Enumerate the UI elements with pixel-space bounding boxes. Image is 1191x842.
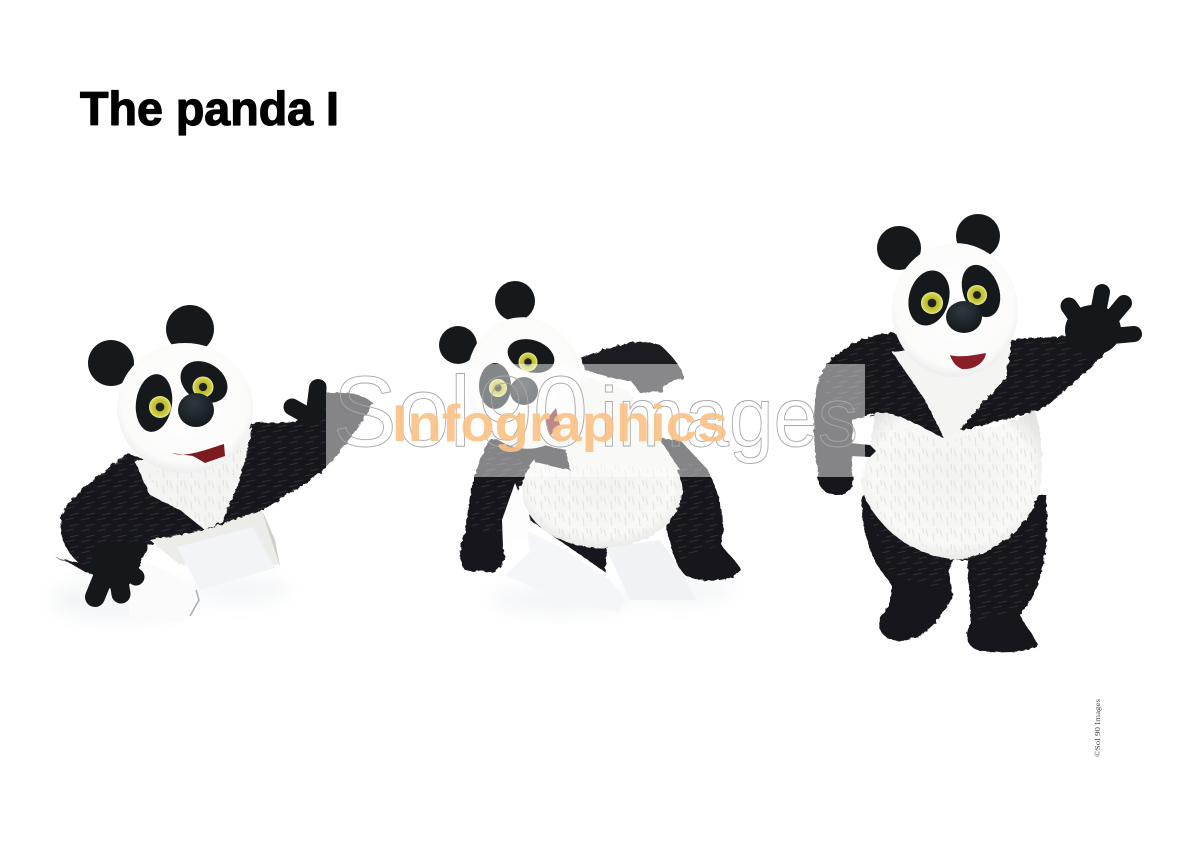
eyes: [921, 285, 987, 314]
mouth: [950, 353, 986, 369]
white chest fur: [145, 440, 245, 528]
belly: [522, 432, 682, 548]
eye patches: [479, 333, 559, 409]
watermark band: [326, 364, 865, 477]
thumb: [850, 443, 876, 457]
hand fingers: [91, 388, 318, 597]
white belly: [862, 410, 1042, 560]
nose: [946, 301, 982, 333]
mouth: [172, 444, 225, 463]
watermark wordmark: images: [600, 370, 858, 464]
left arm and shoulders: [814, 310, 1112, 495]
eyes: [489, 352, 538, 397]
eyes: [149, 376, 214, 418]
belly fur: [867, 416, 1038, 555]
head: [117, 343, 253, 473]
black body and arms: [55, 392, 373, 585]
head: [456, 308, 594, 458]
illustration: panda bursting through paper, left: [50, 305, 373, 622]
torn paper flap, upper: [177, 510, 280, 590]
torn paper flaps: [502, 483, 696, 612]
title: The panda I: [80, 82, 339, 135]
leg fur: [868, 510, 1042, 620]
torn paper flap, lower: [128, 562, 200, 622]
ears: [439, 281, 535, 364]
mouth: [546, 408, 560, 436]
eye patches: [132, 353, 235, 434]
watermark wordmark: [333, 356, 858, 468]
watermark label: Infographics: [392, 395, 728, 453]
white belly fur: [150, 510, 280, 565]
nose: [178, 393, 214, 427]
body and legs: [460, 430, 741, 581]
white chest: [892, 340, 1012, 440]
copyright: ©Sol 90 Images: [1093, 699, 1102, 757]
body fur: [470, 445, 720, 560]
belly fur: [526, 436, 678, 544]
watermark wordmark: Sol: [333, 356, 471, 468]
eye patches: [902, 259, 1007, 330]
illustration: panda standing and waving, right: [814, 214, 1134, 652]
ears: [88, 305, 214, 386]
dark shoulder: [530, 442, 570, 470]
waving hand: [1065, 292, 1134, 355]
white chest: [135, 428, 253, 530]
paper shadow: [50, 578, 290, 620]
illustration: panda crouching through paper, centre: [439, 281, 741, 614]
watermark wordmark: 90: [478, 356, 588, 468]
nose: [510, 377, 538, 405]
raised arm: [582, 342, 684, 393]
legs and feet: [862, 495, 1047, 652]
ears: [877, 214, 1000, 270]
head: [892, 243, 1018, 377]
chest fur: [530, 370, 680, 470]
paper shadow: [490, 578, 735, 614]
